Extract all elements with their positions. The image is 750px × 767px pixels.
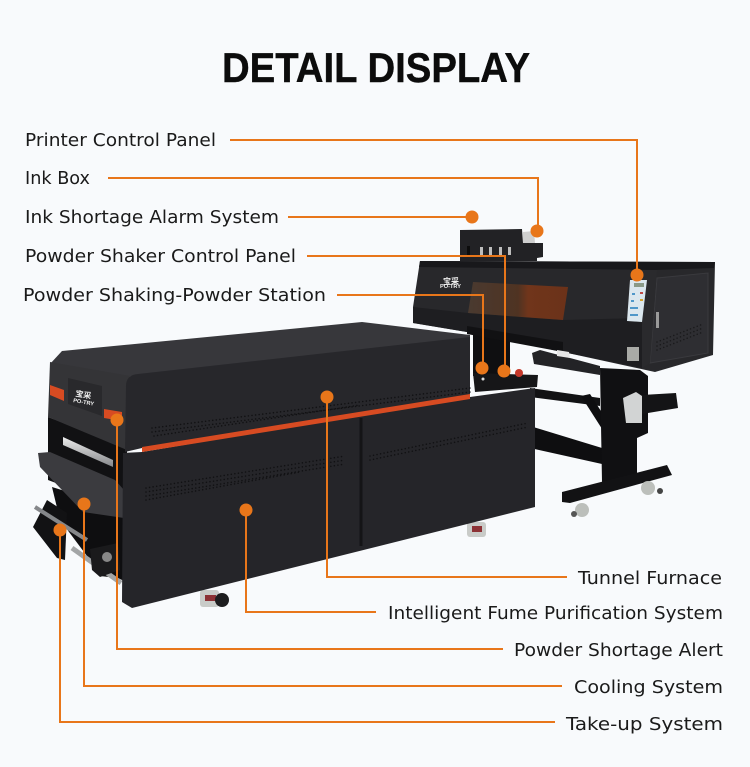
callout: printer control panel [25, 131, 644, 282]
printer media roller [532, 350, 600, 375]
furnace brand logo: PO-TRY [73, 398, 95, 408]
furnace brand logo: 宝采 [74, 388, 92, 402]
callout: printer control panel: Printer Control Panel [25, 131, 216, 151]
callout: tunnel furnace [320, 390, 722, 589]
printer brand logo [440, 276, 461, 290]
callout: ink shortage alarm system: Ink Shortage Alarm System [25, 208, 279, 228]
callout: ink shortage alarm system [25, 208, 478, 228]
control platform [473, 369, 538, 392]
take-up assembly [33, 487, 126, 583]
callout: take-up system [54, 524, 723, 735]
callout: powder shaking-powder station [23, 286, 488, 374]
furnace lower side [122, 388, 535, 608]
callout: take-up system: Take-up System [565, 715, 723, 735]
callout: powder shortage alert [110, 414, 723, 661]
callouts right labels [54, 390, 723, 735]
cooling tray [38, 417, 127, 518]
callout: ink box: Ink Box [25, 169, 90, 189]
printer control panel [627, 280, 647, 361]
furnace red stripe [142, 394, 470, 452]
callout: powder shaker control panel: Powder Shaker Control Panel [25, 247, 296, 267]
callout: ink box [25, 169, 544, 238]
furnace upper side [125, 337, 470, 452]
furnace top [50, 322, 470, 377]
printer brand logo: 宝采 [443, 276, 459, 287]
callout: intelligent fume purification system: Intelligent Fume Purification System [388, 604, 723, 624]
ink box [460, 229, 543, 261]
printer stand [530, 368, 678, 517]
title: DETAIL DISPLAY [222, 44, 530, 91]
callout: powder shaking-powder station: Powder Shaking-Powder Station [23, 286, 326, 306]
furnace left head [48, 362, 130, 450]
callout: intelligent fume purification system [240, 504, 723, 624]
furnace vents [146, 388, 528, 500]
callouts left labels [23, 131, 644, 378]
callout: powder shortage alert: Powder Shortage Alert [514, 641, 723, 661]
callout: cooling system [78, 498, 723, 698]
furnace foot [200, 522, 486, 607]
printer machine [413, 229, 715, 517]
callout: tunnel furnace: Tunnel Furnace [577, 569, 722, 589]
callout: powder shaker control panel [25, 247, 510, 378]
printer body [413, 261, 715, 372]
furnace panel seam [360, 418, 362, 546]
printer brand logo: PO-TRY [440, 284, 461, 290]
furnace brand logo [73, 388, 95, 408]
callout: cooling system: Cooling System [574, 678, 723, 698]
printer under column [473, 325, 510, 376]
tunnel furnace machine [33, 322, 538, 608]
